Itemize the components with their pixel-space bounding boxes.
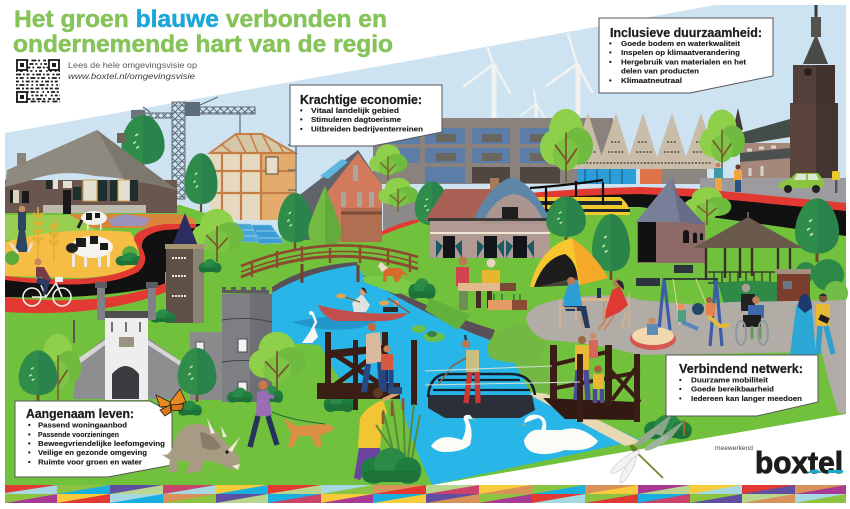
car bbox=[778, 173, 824, 193]
bullets bbox=[300, 106, 423, 134]
tower with dark blue roof bbox=[150, 213, 222, 323]
tile 5 bbox=[216, 485, 268, 503]
tile 10 bbox=[479, 485, 532, 503]
tile 1 bbox=[5, 485, 58, 503]
wheelchair group bbox=[736, 284, 768, 345]
castle gate bbox=[73, 282, 182, 400]
dragonfly bbox=[608, 424, 671, 485]
reeds and bush bbox=[361, 398, 421, 484]
left road and bicycle path bbox=[5, 224, 204, 313]
bullets: Beweegvriendelijke leefomgeving bbox=[38, 439, 165, 448]
bullets: • bbox=[28, 448, 31, 457]
child on left swing bbox=[677, 303, 698, 329]
table bbox=[575, 288, 611, 326]
bullets bbox=[609, 39, 746, 85]
woman in red dress bbox=[598, 279, 629, 330]
main green ground bbox=[5, 205, 846, 485]
bullets: • bbox=[300, 106, 303, 115]
tile 8 bbox=[373, 485, 426, 503]
bush at sand edge bbox=[644, 414, 692, 440]
heading: Aangenaam leven: bbox=[26, 407, 134, 421]
sand bank bbox=[530, 388, 642, 446]
heading: Verbindend netwerk: bbox=[679, 362, 803, 376]
white corner wedge bbox=[432, 414, 846, 485]
title bbox=[13, 6, 393, 58]
train bbox=[530, 180, 630, 222]
fox bbox=[378, 262, 410, 282]
bullets: • bbox=[609, 58, 612, 66]
sky bbox=[5, 5, 846, 300]
tile 15 bbox=[742, 485, 795, 503]
bullets: Goede bodem en waterkwaliteit bbox=[621, 39, 740, 48]
brick house with solar roof bbox=[297, 150, 382, 242]
wordmark: boxtel bbox=[755, 445, 843, 480]
bullets: Duurzame mobiliteit bbox=[691, 376, 768, 384]
cow large bbox=[66, 236, 113, 267]
trees around brick house bbox=[278, 144, 449, 250]
turbine 1 bbox=[464, 46, 510, 120]
playground swing and sandbox bbox=[630, 278, 730, 350]
conifer bbox=[308, 186, 341, 247]
heron bbox=[302, 311, 318, 343]
bullets: Passende voorzieningen bbox=[38, 430, 119, 439]
water lily and frog bbox=[412, 325, 445, 342]
bullets: • bbox=[300, 115, 303, 124]
street square and car bbox=[700, 162, 846, 206]
bullets: Inspelen op klimaatverandering bbox=[621, 48, 740, 57]
title line one: Het groen blauwe verbonden en bbox=[14, 6, 387, 33]
ropes across water bbox=[425, 366, 580, 385]
central dock with fishing woman bbox=[428, 335, 535, 418]
right jetty with family bbox=[543, 333, 640, 422]
gazebo bbox=[693, 212, 803, 283]
triceratops bbox=[158, 418, 240, 473]
cows bbox=[66, 211, 113, 267]
church bbox=[733, 5, 838, 178]
grey plaza bbox=[526, 295, 846, 414]
bullets: Ruimte voor groen en water bbox=[38, 458, 142, 466]
construction crane bbox=[131, 97, 255, 199]
left swan bbox=[431, 415, 476, 452]
panel: Inclusieve duurzaamheid bbox=[599, 18, 773, 93]
heading: Krachtige economie: bbox=[300, 93, 422, 107]
butterfly bbox=[156, 389, 186, 416]
railway road right bbox=[530, 187, 846, 236]
wind turbines bbox=[464, 34, 592, 120]
walking person with dog bbox=[250, 380, 335, 447]
swans bbox=[431, 415, 598, 454]
tile 13 bbox=[638, 485, 690, 503]
stepped gable facades bbox=[572, 113, 716, 184]
bullets: Goede bereikbaarheid bbox=[691, 384, 774, 394]
solar panels bbox=[232, 224, 284, 244]
bullets: • bbox=[28, 430, 31, 439]
tile 14 bbox=[690, 485, 742, 503]
bullets: Passend woningaanbod bbox=[38, 420, 127, 430]
man with blue shirt bbox=[560, 277, 590, 328]
child on right swing bbox=[706, 297, 730, 326]
boxtel logo bbox=[715, 445, 843, 480]
tile 11 bbox=[532, 485, 585, 503]
stream darker water tones bbox=[292, 316, 386, 330]
turbine 3 bbox=[520, 90, 545, 120]
tile 16 bbox=[795, 485, 846, 503]
bullets: Vitaal landelijk gebied bbox=[311, 106, 399, 115]
title line two: ondernemende hart van de regio bbox=[13, 31, 393, 58]
trees behind the town square bbox=[540, 109, 745, 182]
timber frame house under construction bbox=[210, 134, 296, 220]
bullets: • bbox=[609, 76, 612, 85]
farmyard and yellow field bbox=[5, 214, 196, 278]
bullets: • bbox=[300, 124, 303, 134]
bushes by the bank bbox=[408, 278, 558, 395]
tile 9 bbox=[426, 485, 479, 503]
bullets: Iedereen kan langer meedoen bbox=[691, 394, 802, 403]
intro line: Lees de hele omgevingsvisie op bbox=[68, 60, 197, 70]
cyclist bbox=[23, 258, 71, 306]
panel: Aangenaam leven bbox=[15, 401, 172, 477]
arched wooden bridge bbox=[241, 245, 418, 283]
bullets bbox=[28, 420, 165, 466]
apartment block bbox=[373, 118, 613, 184]
link text bbox=[68, 60, 197, 81]
nave bbox=[740, 119, 790, 145]
QR code bbox=[16, 60, 60, 102]
farmer and wheat bbox=[10, 206, 59, 262]
bullets: • bbox=[28, 439, 31, 448]
people on left jetty bbox=[364, 323, 393, 392]
people on the street bbox=[714, 162, 742, 192]
tile 6 bbox=[268, 485, 321, 503]
heading: Inclusieve duurzaamheid: bbox=[610, 26, 762, 40]
teal dots bbox=[807, 470, 843, 473]
tile 4 bbox=[163, 485, 216, 503]
woman in blue robe and man with tablet bbox=[790, 294, 833, 355]
planter table with two people bbox=[456, 256, 527, 310]
bullets: Uitbreiden bedrijventerreinen bbox=[311, 124, 423, 134]
bullets: • bbox=[28, 458, 31, 466]
tree behind farmhouse bbox=[121, 115, 165, 172]
tree next to crane bbox=[184, 153, 218, 212]
bullets: Klimaatneutraal bbox=[621, 76, 682, 85]
thatched farmhouse bbox=[5, 130, 177, 214]
stream bbox=[272, 265, 640, 485]
bullets: Veilige en gezonde omgeving bbox=[38, 448, 147, 457]
tile 12 bbox=[585, 485, 638, 503]
tile 2 bbox=[57, 485, 110, 503]
farm windows bbox=[10, 180, 138, 214]
bullets: • bbox=[609, 39, 612, 48]
light tree behind tower bbox=[192, 209, 243, 262]
bullets: Hergebruik van materialen en het bbox=[621, 58, 746, 66]
canoe with paddlers bbox=[318, 288, 410, 321]
bullets: Stimuleren dagtoerisme bbox=[311, 115, 401, 124]
tile 3 bbox=[110, 485, 163, 503]
fox bank bbox=[363, 276, 420, 294]
trees around the castle bbox=[19, 332, 354, 416]
woman photographing with reeds bbox=[354, 387, 402, 480]
walker bbox=[250, 380, 277, 447]
bullets: delen van producten bbox=[621, 66, 699, 76]
sandbox bbox=[630, 317, 676, 350]
road to brick house bbox=[367, 219, 419, 241]
bullets: • bbox=[609, 48, 612, 57]
bullets: • bbox=[679, 376, 682, 384]
panel: Krachtige economie bbox=[290, 85, 442, 146]
trees near tent bbox=[546, 187, 839, 280]
meewerkend: meewerkend bbox=[715, 445, 753, 452]
tower bbox=[790, 103, 838, 178]
castle round tower bbox=[190, 287, 272, 402]
hedges and brick pillar bbox=[718, 259, 848, 316]
chapel bbox=[636, 177, 705, 286]
turbine 2 bbox=[546, 34, 592, 114]
left jetty bbox=[317, 332, 417, 410]
farmhouse with arched facade bbox=[425, 177, 550, 258]
far grey lot bbox=[383, 195, 425, 230]
bullets: • bbox=[679, 394, 682, 403]
bullets bbox=[679, 376, 802, 403]
dark banks of the stream bbox=[272, 262, 495, 346]
bullets: • bbox=[28, 420, 31, 430]
tent bbox=[530, 238, 608, 287]
url: www.boxtel.nl/omgevingsvisie bbox=[68, 71, 195, 81]
bullets: • bbox=[679, 384, 682, 394]
right swan bbox=[521, 415, 598, 454]
multicolour strip bbox=[5, 485, 846, 503]
swing frame bbox=[659, 278, 722, 346]
dog bbox=[272, 412, 335, 447]
green below the plaza bbox=[640, 352, 835, 442]
panel: Verbindend netwerk bbox=[666, 355, 818, 416]
couple at the table bbox=[560, 277, 629, 330]
parking meter bbox=[832, 171, 840, 193]
tile 7 bbox=[321, 485, 373, 503]
cow small bbox=[78, 211, 107, 230]
